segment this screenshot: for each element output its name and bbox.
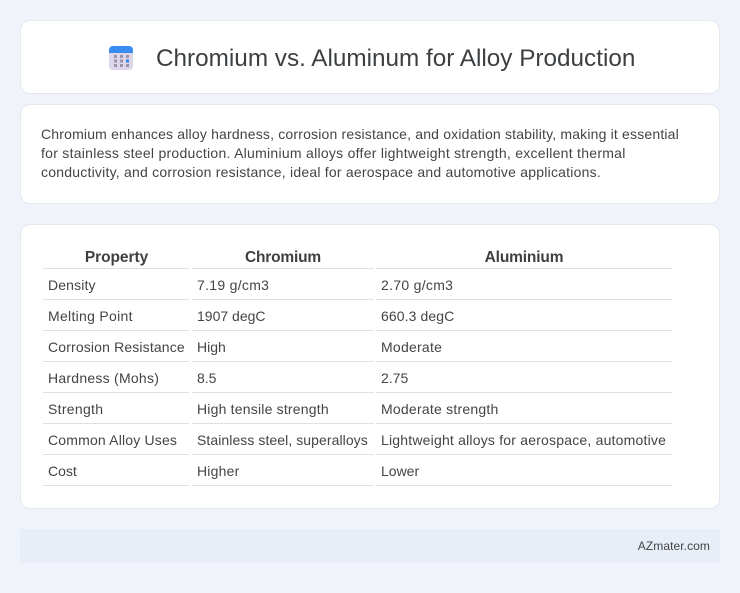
row: density: 2.70 g/cm3 bbox=[381, 277, 453, 293]
row: corrosion resistance bbox=[43, 339, 672, 362]
row: strength: Moderate strength bbox=[381, 401, 499, 417]
table header: Property bbox=[85, 249, 148, 266]
row: hardness: 2.75 bbox=[381, 370, 408, 386]
table header bbox=[43, 249, 672, 269]
row: melting point: Melting Point bbox=[48, 308, 133, 324]
row: cost: Higher bbox=[197, 463, 239, 479]
title card bbox=[20, 20, 720, 94]
row: cost bbox=[43, 463, 672, 486]
footer bar bbox=[20, 529, 720, 563]
row: cost: Cost bbox=[48, 463, 77, 479]
row: density: Density bbox=[48, 277, 96, 293]
row: corrosion resistance: Moderate bbox=[381, 339, 442, 355]
row: hardness: 8.5 bbox=[197, 370, 216, 386]
summary card bbox=[20, 104, 720, 204]
title: Chromium vs. Aluminum for Alloy Production bbox=[156, 45, 635, 72]
row: strength bbox=[43, 401, 672, 424]
summary text: conductivity, and corrosion resistance, ideal for aerospace and automotive applications. bbox=[41, 164, 601, 180]
row: melting point: 1907 degC bbox=[197, 308, 266, 324]
row: corrosion resistance: Corrosion Resistance bbox=[48, 339, 185, 355]
table card bbox=[20, 224, 720, 509]
row: cost: Lower bbox=[381, 463, 419, 479]
summary text: for stainless steel production. Aluminium alloys offer lightweight strength, excellent thermal bbox=[41, 145, 626, 161]
row: hardness bbox=[43, 370, 672, 393]
icon: calendar bbox=[109, 46, 133, 70]
row: melting point: 660.3 degC bbox=[381, 308, 454, 324]
table header: Aluminium bbox=[485, 249, 563, 266]
summary text bbox=[41, 126, 679, 180]
row: corrosion resistance: High bbox=[197, 339, 226, 355]
row: strength: Strength bbox=[48, 401, 103, 417]
row: common alloy uses: Lightweight alloys for aerospace, automotive bbox=[381, 432, 666, 448]
row: strength: High tensile strength bbox=[197, 401, 329, 417]
row: density bbox=[43, 277, 672, 300]
comparison table bbox=[43, 249, 672, 486]
footer brand: AZmater.com bbox=[638, 539, 710, 553]
row: common alloy uses: Common Alloy Uses bbox=[48, 432, 177, 448]
row: hardness: Hardness (Mohs) bbox=[48, 370, 159, 386]
summary text: Chromium enhances alloy hardness, corrosion resistance, and oxidation stability, making it essential bbox=[41, 126, 679, 142]
row: density: 7.19 g/cm3 bbox=[197, 277, 269, 293]
table header: Chromium bbox=[245, 249, 321, 266]
row: melting point bbox=[43, 308, 672, 331]
row: common alloy uses bbox=[43, 432, 672, 455]
row: common alloy uses: Stainless steel, superalloys bbox=[197, 432, 368, 448]
